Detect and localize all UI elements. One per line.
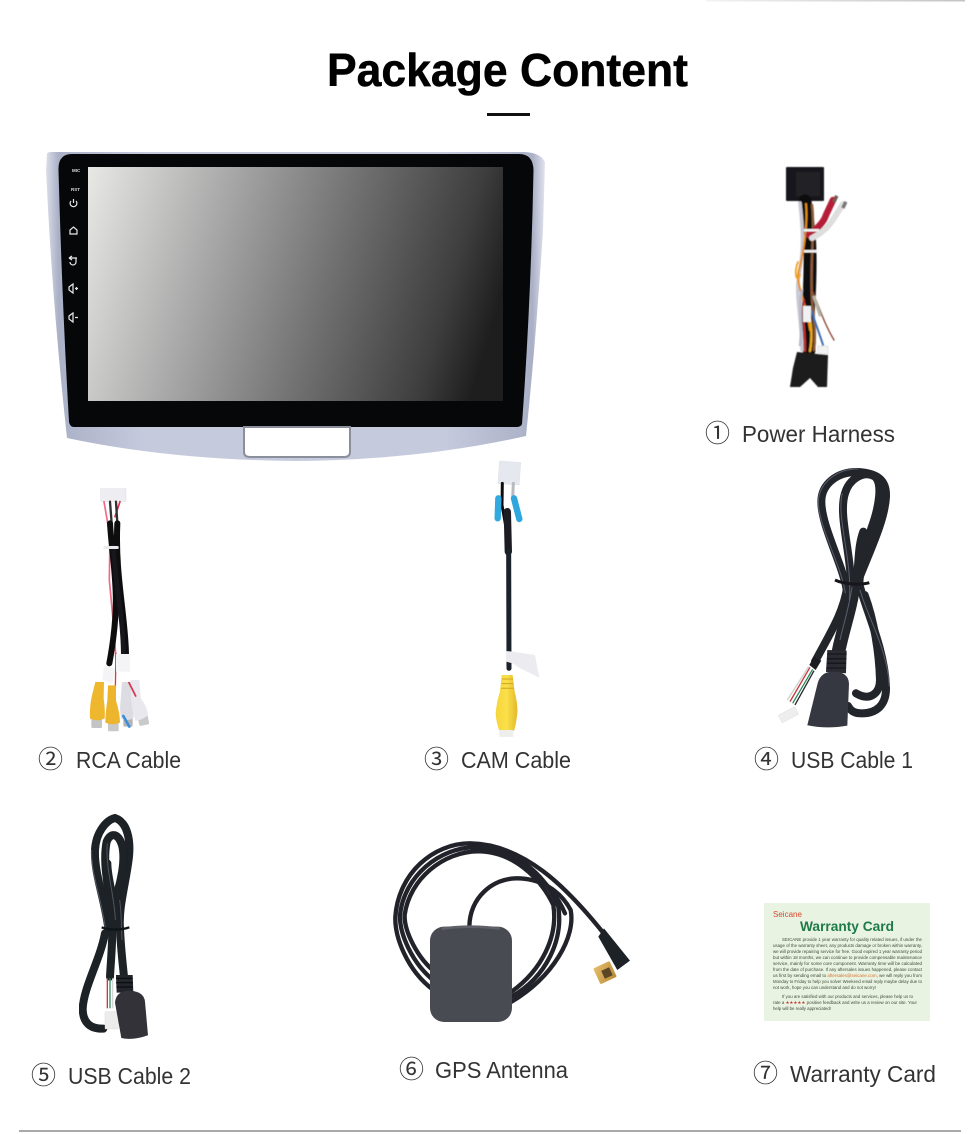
label: usb cable 2: ⑤ — [31, 1056, 56, 1092]
warranty card — [764, 903, 930, 1021]
side buttons: MIC — [72, 168, 81, 173]
rca tips — [832, 195, 838, 203]
tie — [102, 927, 129, 930]
label: usb cable 1: USB Cable 1 — [791, 747, 913, 773]
icon: volume up — [69, 284, 78, 293]
label: usb cable 2: USB Cable 2 — [68, 1063, 191, 1089]
cable end sleeve — [809, 657, 821, 670]
label: cam cable — [424, 740, 571, 776]
label: warranty card: Warranty Card — [790, 1061, 936, 1087]
brand: Seicane — [773, 910, 802, 919]
white plug — [105, 1012, 118, 1029]
white tag — [506, 651, 539, 678]
silver frame — [46, 152, 545, 461]
cable loops — [83, 818, 129, 1029]
cam wires — [498, 483, 519, 668]
cam cable — [496, 461, 539, 737]
black bezel — [58, 154, 534, 427]
usb connector — [116, 975, 133, 993]
yellow plug — [496, 675, 517, 731]
wire tags — [803, 306, 811, 322]
blue sleeves — [488, 498, 508, 518]
tie — [835, 580, 869, 584]
card body: rate a ★★★★★ positive feedback and write us a review on our site. Your — [773, 1000, 917, 1005]
card body: If you are satisfied with our products and services, please help us to — [782, 994, 913, 999]
usb cable 2 — [83, 818, 148, 1039]
cable highlights — [92, 843, 122, 940]
white connector — [498, 461, 521, 485]
side buttons: RST — [71, 187, 80, 192]
card body: help will be really appreciated! — [773, 1006, 831, 1011]
title: Package Content — [327, 44, 688, 96]
small white plug — [818, 346, 828, 354]
card body — [773, 937, 923, 1011]
icon: volume down — [69, 313, 78, 322]
card body: SEICANE provide 1 year warranty for quality related issues, if under the — [782, 937, 922, 942]
power harness — [786, 167, 847, 387]
label: warranty card — [753, 1054, 936, 1090]
blue tag — [123, 716, 129, 727]
rca cable — [90, 489, 149, 731]
radio cutout — [244, 427, 350, 457]
card body: we will provide repairing service for free. Good expired 1 year warranty period — [773, 949, 922, 954]
tie — [103, 546, 119, 549]
bottom divider line — [19, 1130, 961, 1132]
card body: us first by sending email to aftersales@seicane.com, we will reply you from — [773, 973, 922, 978]
harness wires — [796, 200, 843, 351]
cable highlights — [818, 469, 889, 687]
label: usb cable 1: ④ — [754, 740, 779, 776]
label: usb cable 2 — [31, 1056, 191, 1092]
colored wires — [107, 978, 113, 1008]
label: cam cable: CAM Cable — [461, 747, 571, 773]
label: gps antenna: ⑥ — [399, 1050, 424, 1086]
screen — [88, 167, 503, 401]
usb cable 1 — [778, 469, 889, 727]
zip ties — [804, 229, 819, 232]
icon: back — [69, 256, 77, 265]
white plugs — [120, 682, 133, 720]
gold sma — [593, 961, 617, 984]
harness bottom connector — [790, 352, 828, 387]
card title: Warranty Card — [800, 919, 894, 934]
icon: power — [70, 199, 77, 207]
cable loops — [815, 472, 886, 713]
card body: from the date of purchase. If any aftersales issues happened, please contact — [773, 967, 923, 972]
card body: Monday to Friday to help you solve! Weekend email reply maybe delay due to — [773, 979, 922, 984]
card body: usage of the warranty sheet, any products damage or broken within warranty, — [773, 943, 922, 948]
label: rca cable: RCA Cable — [76, 747, 181, 773]
card body: but within 18 months, we can continue to provide compensable maintenance — [773, 955, 922, 960]
antenna cable loops — [395, 843, 605, 1002]
label: warranty card: ⑦ — [753, 1054, 778, 1090]
card background — [764, 903, 930, 1021]
icon: home — [70, 227, 77, 234]
cable labels — [116, 654, 130, 672]
title underline — [487, 113, 530, 116]
gps antenna — [395, 843, 630, 1022]
yellow plugs — [90, 682, 105, 720]
label: cam cable: ③ — [424, 740, 449, 776]
harness box — [786, 167, 824, 201]
label: gps antenna: GPS Antenna — [435, 1057, 568, 1083]
top divider line — [706, 0, 965, 2]
card body: service, mainly for some core component. Warranty time will be calculated — [773, 961, 922, 966]
side buttons — [69, 168, 81, 322]
label: rca cable: ② — [38, 740, 63, 776]
label: power harness: ① — [705, 414, 730, 450]
plug tips — [91, 719, 102, 728]
head unit — [46, 152, 545, 461]
label: power harness — [705, 414, 895, 450]
antenna puck — [430, 927, 512, 1022]
rca wires — [104, 502, 126, 707]
right angle connector — [598, 928, 630, 970]
white connector — [101, 489, 126, 501]
label: usb cable 1 — [754, 740, 913, 776]
label: power harness: Power Harness — [742, 421, 895, 447]
usb connector — [826, 650, 847, 673]
colored wires and plug — [787, 667, 814, 705]
label: gps antenna — [399, 1050, 568, 1086]
label: rca cable — [38, 740, 181, 776]
card body: not work, hope you can understand and do not worry! — [773, 985, 876, 990]
